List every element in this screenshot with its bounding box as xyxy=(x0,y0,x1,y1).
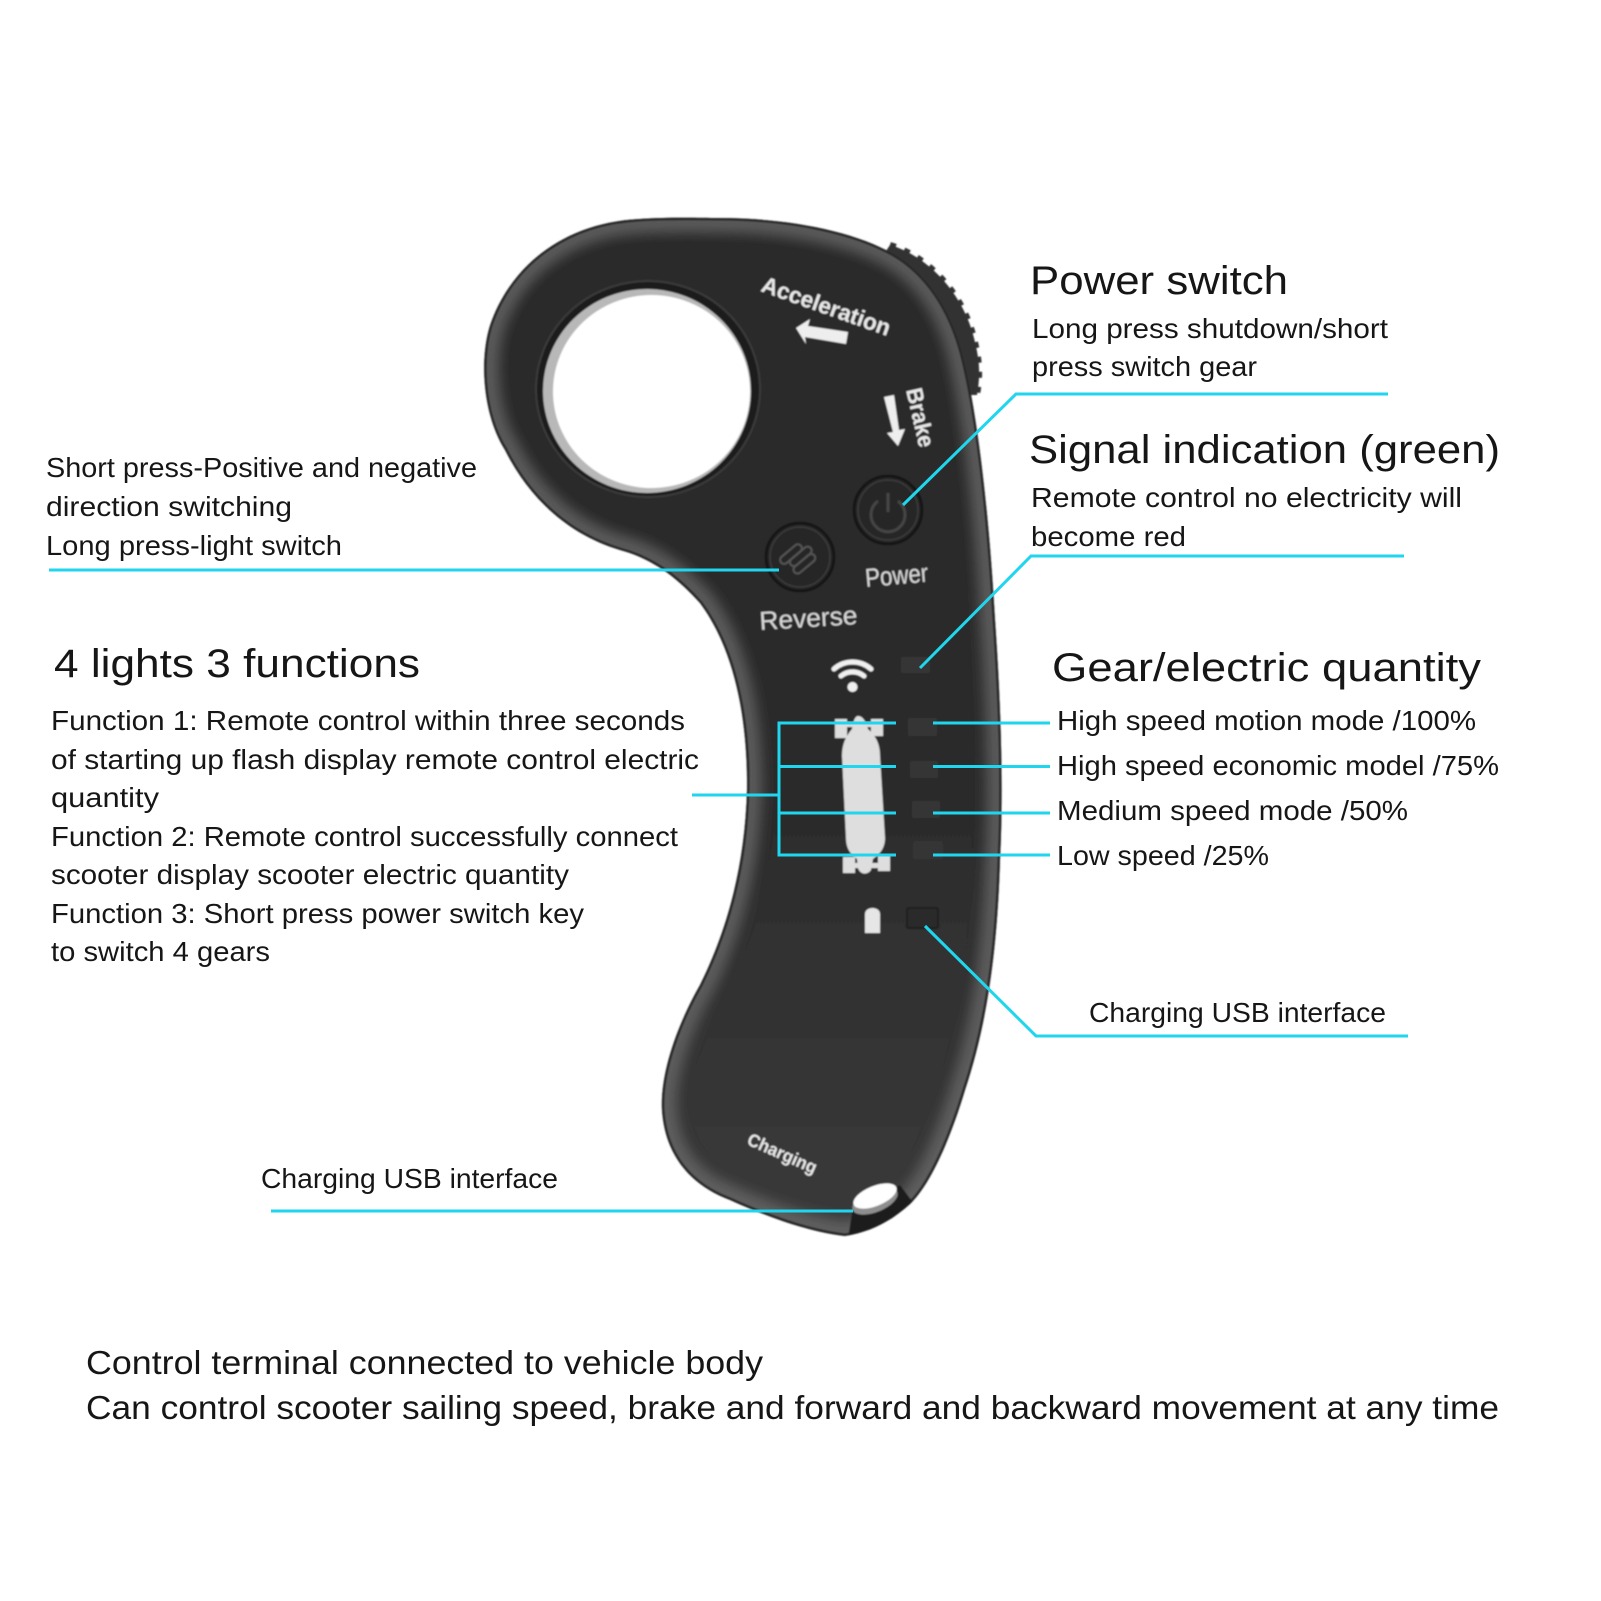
text: power switch description: Long press shutdown/short xyxy=(1032,313,1388,344)
leader line: reverse xyxy=(49,568,779,572)
text: signal description: Remote control no electricity will xyxy=(1031,482,1462,513)
text: function descriptions: quantity xyxy=(51,782,159,813)
callout: reverse button xyxy=(46,452,779,570)
text: function descriptions: Function 2: Remote control successfully connect xyxy=(51,821,678,852)
leader lines: gear levels xyxy=(933,723,1050,855)
text: reverse description: Long press-light switch xyxy=(46,530,342,561)
text: function descriptions: Function 3: Short press power switch key xyxy=(51,898,584,929)
text: gear levels: Medium speed mode /50% xyxy=(1057,795,1408,826)
heading: power switch: Power switch xyxy=(1030,259,1288,303)
footer text: Can control scooter sailing speed, brake and forward and backward movement at any time xyxy=(86,1389,1499,1426)
panel: gear and electric quantity xyxy=(933,646,1499,871)
remote control device xyxy=(484,218,1002,1238)
callout: charging USB interface right xyxy=(925,926,1408,1036)
text: function descriptions: scooter display scooter electric quantity xyxy=(51,859,569,890)
footer text: Control terminal connected to vehicle body xyxy=(86,1344,764,1381)
panel: 4 lights 3 functions xyxy=(51,642,896,967)
icon: battery xyxy=(865,908,880,933)
text: gear levels: Low speed /25% xyxy=(1057,840,1269,871)
text: signal description: become red xyxy=(1031,521,1186,552)
reverse button xyxy=(766,523,834,591)
text: signal description xyxy=(1031,482,1462,552)
text: charging USB interface: Charging USB interface xyxy=(1089,997,1386,1028)
power button xyxy=(854,476,922,544)
leader line: charge LED xyxy=(925,926,1408,1036)
heading: gear/electric quantity: Gear/electric quantity xyxy=(1052,646,1481,690)
icon: acceleration arrow xyxy=(796,319,848,344)
power label: Power xyxy=(864,558,930,593)
device body xyxy=(484,218,1002,1236)
leader line: signal xyxy=(920,556,1404,668)
text: power switch description xyxy=(1032,313,1388,382)
heading: 4 lights 3 functions: 4 lights 3 functions xyxy=(54,642,420,686)
scroll wheel xyxy=(880,245,979,395)
text: gear levels: High speed motion mode /100% xyxy=(1057,705,1476,736)
icon: wifi signal xyxy=(834,662,871,690)
reverse label: Reverse xyxy=(759,600,858,636)
USB port xyxy=(848,1182,912,1236)
footer text xyxy=(86,1344,1499,1426)
heading: signal indication: Signal indication (green) xyxy=(1029,428,1500,472)
charge LED xyxy=(907,908,938,928)
leader line: power xyxy=(903,394,1388,505)
charging label: Charging xyxy=(744,1129,820,1178)
icon: brake arrow xyxy=(884,395,905,446)
text: power switch description: press switch gear xyxy=(1032,351,1257,382)
callout: signal indication xyxy=(920,428,1500,668)
text: reverse description xyxy=(46,452,477,561)
text: function descriptions: of starting up flash display remote control electric xyxy=(51,744,699,775)
gear LEDs xyxy=(908,718,943,859)
bracket lines: four lights xyxy=(692,723,896,855)
text: function descriptions: to switch 4 gears xyxy=(51,936,270,967)
icon: skateboard xyxy=(835,716,890,874)
text: function descriptions: Function 1: Remote control within three seconds xyxy=(51,705,685,736)
signal LED xyxy=(901,657,930,673)
text: reverse description: Short press-Positive and negative xyxy=(46,452,477,483)
text: gear levels xyxy=(1057,705,1499,871)
callout: power switch xyxy=(903,259,1388,505)
text: reverse description: direction switching xyxy=(46,491,292,522)
text: function descriptions xyxy=(51,705,699,967)
lanyard hole xyxy=(536,281,760,497)
text: charging USB interface: Charging USB interface xyxy=(261,1163,558,1194)
brake label: Brake xyxy=(901,385,940,450)
leader line: USB port xyxy=(271,1210,853,1212)
acceleration label: Acceleration xyxy=(758,271,894,341)
text: gear levels: High speed economic model /75% xyxy=(1057,750,1499,781)
